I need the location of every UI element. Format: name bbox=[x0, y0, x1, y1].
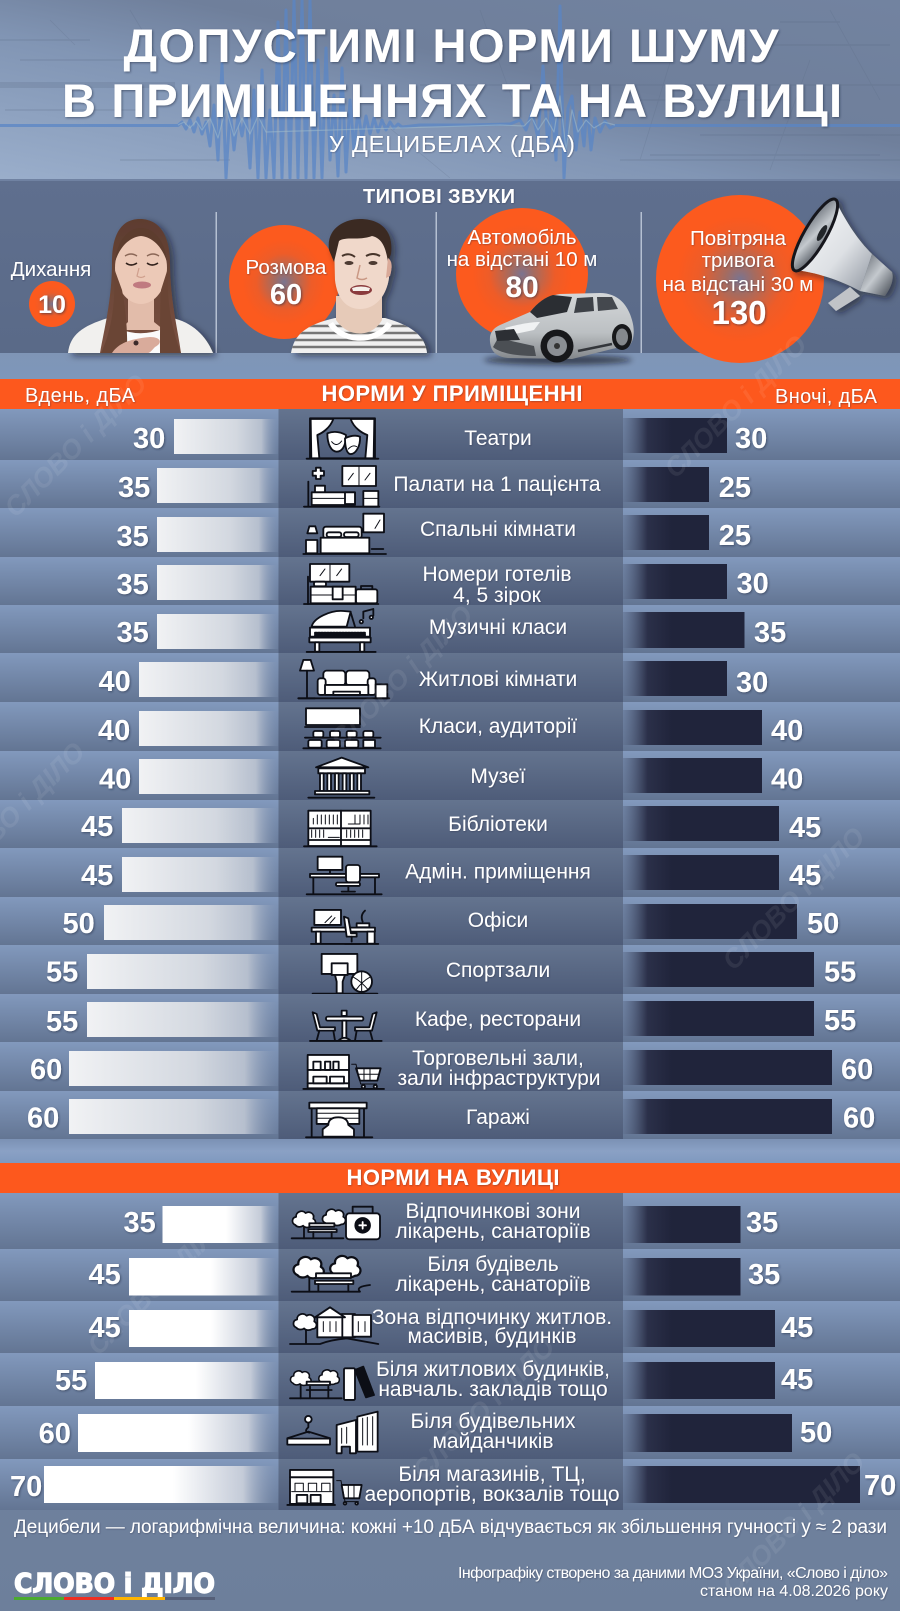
day value: 45 bbox=[81, 860, 113, 892]
night value: 30 bbox=[736, 667, 768, 699]
icon: living room bbox=[298, 660, 389, 698]
text: СЛОВО і ДІЛО bbox=[659, 330, 813, 484]
item: car bbox=[447, 208, 634, 365]
day value: 35 bbox=[116, 521, 149, 553]
panel: typical sounds bbox=[0, 179, 900, 379]
night bar bbox=[623, 564, 727, 599]
icon: shop shelves and cart bbox=[303, 1055, 384, 1089]
label: siren: на відстані 30 м bbox=[663, 273, 813, 296]
night bar bbox=[623, 904, 797, 939]
day value: 45 bbox=[88, 1312, 121, 1344]
icon: crane hook and buildings bbox=[287, 1412, 378, 1453]
header panel bbox=[0, 0, 900, 179]
day value: 50 bbox=[62, 908, 95, 940]
label: лікарень, санаторіїв bbox=[395, 1273, 591, 1296]
night value: 25 bbox=[719, 472, 751, 504]
night bar bbox=[623, 467, 709, 502]
day bar bbox=[78, 1414, 278, 1452]
row: music classes bbox=[0, 605, 900, 653]
icon: residential area bbox=[290, 1307, 378, 1344]
night value: 35 bbox=[746, 1207, 778, 1239]
day bar bbox=[157, 614, 278, 649]
photo: car bbox=[484, 293, 634, 365]
circle: conversation 60 bbox=[229, 225, 339, 339]
heading bar: outdoor norms bbox=[0, 1163, 900, 1193]
day value: 40 bbox=[99, 764, 131, 796]
label: Біля житлових будинків, bbox=[376, 1358, 610, 1381]
icon: library bbox=[304, 811, 377, 846]
text: СЛОВО і ДІЛО bbox=[82, 1207, 236, 1361]
label: Зона відпочинку житлов. bbox=[372, 1306, 612, 1329]
icon: shop and cart bbox=[287, 1470, 362, 1505]
item: conversation bbox=[229, 219, 440, 353]
heading: indoor: НОРМИ У ПРИМІЩЕННІ bbox=[322, 381, 582, 406]
night bar bbox=[623, 1099, 832, 1134]
icon: grand piano bbox=[307, 609, 376, 652]
subtitle: У ДЕЦИБЕЛАХ (ДБА) bbox=[329, 131, 575, 157]
panel: indoor norms bbox=[0, 409, 900, 1139]
label: Номери готелів bbox=[422, 563, 572, 586]
row: living rooms bbox=[0, 653, 900, 702]
night bar bbox=[623, 758, 762, 793]
icon: garage bbox=[306, 1103, 372, 1137]
label: зали інфраструктури bbox=[397, 1067, 601, 1090]
row: museums bbox=[0, 751, 900, 800]
day value: 35 bbox=[118, 472, 150, 504]
day bar bbox=[139, 662, 278, 697]
circle: breathing 10 bbox=[29, 281, 75, 327]
icon: office bbox=[311, 910, 378, 944]
day bar bbox=[157, 517, 278, 552]
row: shopping halls bbox=[0, 1042, 900, 1091]
icon: museum bbox=[308, 758, 374, 798]
photo: man bbox=[285, 219, 440, 353]
day bar bbox=[122, 857, 278, 892]
day bar bbox=[157, 468, 278, 503]
heading: typical sounds: ТИПОВІ ЗВУКИ bbox=[363, 186, 515, 208]
night bar bbox=[623, 710, 762, 745]
row: cafes bbox=[0, 994, 900, 1042]
column label: night: Вночі, дБА bbox=[775, 386, 878, 408]
icon: park bench and trees bbox=[292, 1256, 370, 1292]
label: навчаль. закладів тощо bbox=[378, 1378, 608, 1401]
label: Біля магазинів, ТЦ, bbox=[398, 1463, 586, 1486]
label: car: на відстані 10 м bbox=[447, 248, 597, 271]
night bar bbox=[623, 1001, 814, 1036]
label: car: Автомобіль bbox=[467, 226, 577, 249]
label: Класи, аудиторії bbox=[419, 715, 577, 738]
night value: 25 bbox=[719, 520, 751, 552]
text: СЛОВО і ДІЛО bbox=[407, 1332, 561, 1486]
row: garages bbox=[0, 1091, 900, 1139]
day bar bbox=[122, 808, 278, 843]
row: admin premises bbox=[0, 848, 900, 897]
night bar bbox=[623, 1310, 775, 1347]
label: аеропортів, вокзалів тощо bbox=[364, 1483, 620, 1506]
night bar bbox=[623, 1414, 792, 1452]
night bar bbox=[623, 952, 814, 987]
night value: 50 bbox=[807, 908, 839, 940]
icon: theatre bbox=[307, 418, 378, 459]
day bar bbox=[139, 711, 278, 746]
heading: outdoor: НОРМИ НА ВУЛИЦІ bbox=[346, 1165, 560, 1190]
row: classrooms bbox=[0, 702, 900, 751]
label: майданчиків bbox=[432, 1430, 554, 1453]
label: Театри bbox=[464, 427, 532, 450]
night value: 55 bbox=[824, 1005, 856, 1037]
text: СЛОВО і ДІЛО bbox=[717, 822, 871, 976]
title: ДОПУСТИМІ НОРМИ ШУМУ bbox=[124, 19, 779, 72]
day bar bbox=[174, 419, 278, 454]
label: Відпочинкові зони bbox=[406, 1200, 580, 1223]
day value: 55 bbox=[55, 1365, 87, 1397]
logo: СЛОВО і ДІЛО bbox=[14, 1568, 215, 1600]
label: conversation: Розмова bbox=[246, 256, 327, 279]
row: construction sites bbox=[0, 1406, 900, 1459]
icon: gym bbox=[313, 954, 377, 994]
day bar bbox=[104, 905, 278, 940]
icon: cafe bbox=[310, 1011, 382, 1041]
label: siren: тривога bbox=[702, 249, 775, 272]
row: near homes and schools bbox=[0, 1353, 900, 1406]
label: масивів, будинків bbox=[408, 1325, 576, 1348]
night value: 50 bbox=[800, 1417, 832, 1449]
row: offices bbox=[0, 897, 900, 945]
title: В ПРИМІЩЕННЯХ ТА НА ВУЛИЦІ bbox=[62, 74, 842, 127]
day bar bbox=[129, 1258, 278, 1296]
night bar bbox=[623, 1206, 740, 1243]
day value: 35 bbox=[124, 1207, 156, 1239]
label: Офіси bbox=[468, 909, 528, 932]
circle: car 80 bbox=[456, 208, 588, 340]
text: СЛОВО і ДІЛО bbox=[325, 600, 479, 754]
label: Біля будівель bbox=[427, 1253, 559, 1276]
day bar bbox=[129, 1310, 278, 1347]
row: libraries bbox=[0, 800, 900, 848]
panel: outdoor norms bbox=[0, 1193, 900, 1510]
night bar bbox=[623, 418, 727, 453]
night value: 45 bbox=[781, 1312, 813, 1344]
row: theatres bbox=[0, 409, 900, 460]
icon: bedroom bbox=[303, 514, 386, 554]
night value: 40 bbox=[771, 764, 803, 796]
value: 60: 60 bbox=[270, 279, 302, 311]
night value: 60 bbox=[843, 1102, 875, 1134]
day value: 35 bbox=[116, 617, 149, 649]
day value: 60 bbox=[27, 1102, 59, 1134]
row: near hospital buildings bbox=[0, 1249, 900, 1301]
circle: siren 130 bbox=[656, 195, 824, 363]
night value: 45 bbox=[789, 812, 821, 844]
label: siren: Повітряна bbox=[690, 227, 787, 250]
day value: 55 bbox=[46, 1006, 78, 1038]
note: Децибели — логарифмічна величина: кожні +10 дБА відчувається як збільшення гучності у ≈ 2 рази bbox=[14, 1517, 887, 1538]
night bar bbox=[623, 612, 744, 648]
day bar bbox=[69, 1051, 278, 1086]
label: Спортзали bbox=[446, 959, 550, 982]
row: hospital rest zones bbox=[0, 1193, 900, 1249]
label: Палати на 1 пацієнта bbox=[393, 473, 601, 496]
icon: classroom bbox=[303, 708, 381, 748]
icon: admin desk bbox=[307, 857, 382, 894]
night value: 30 bbox=[736, 568, 769, 600]
waveform bbox=[0, 0, 900, 178]
night value: 35 bbox=[754, 617, 786, 649]
day value: 60 bbox=[39, 1418, 71, 1450]
night value: 55 bbox=[824, 956, 856, 988]
night value: 35 bbox=[748, 1259, 780, 1291]
row: hotel rooms bbox=[0, 557, 900, 607]
value: 80: 80 bbox=[505, 271, 539, 304]
icon: hospital ward bbox=[304, 466, 379, 507]
item: air raid siren bbox=[656, 194, 893, 363]
day value: 40 bbox=[98, 715, 130, 747]
label: Кафе, ресторани bbox=[415, 1008, 581, 1031]
day bar bbox=[87, 954, 278, 989]
icon: park and first-aid kit bbox=[292, 1207, 380, 1239]
label: Торговельні зали, bbox=[412, 1047, 584, 1070]
day value: 30 bbox=[133, 423, 165, 455]
night bar bbox=[623, 515, 709, 550]
source credit: станом на 4.08.2026 року bbox=[700, 1583, 888, 1600]
day value: 35 bbox=[116, 569, 149, 601]
column label: day: Вдень, дБА bbox=[25, 385, 136, 407]
day value: 40 bbox=[98, 666, 131, 698]
day value: 60 bbox=[30, 1054, 62, 1086]
row: gyms bbox=[0, 945, 900, 994]
label: 4, 5 зірок bbox=[453, 584, 542, 607]
day bar bbox=[139, 759, 278, 794]
night value: 45 bbox=[781, 1364, 813, 1396]
icon: megaphone bbox=[785, 194, 893, 311]
day value: 45 bbox=[81, 811, 113, 843]
label: Бібліотеки bbox=[448, 813, 548, 836]
day bar bbox=[157, 565, 278, 600]
day value: 55 bbox=[46, 956, 78, 988]
label: Адмін. приміщення bbox=[405, 860, 591, 884]
night value: 70 bbox=[864, 1470, 896, 1502]
icon: hotel room bbox=[304, 564, 378, 604]
row: bedrooms bbox=[0, 508, 900, 557]
night value: 60 bbox=[841, 1054, 873, 1086]
day value: 70 bbox=[10, 1471, 42, 1503]
day bar bbox=[95, 1362, 278, 1399]
label: лікарень, санаторіїв bbox=[395, 1220, 591, 1243]
heading bar: indoor norms bbox=[0, 379, 900, 409]
row: shops and airports bbox=[0, 1459, 900, 1510]
night bar bbox=[623, 1050, 832, 1085]
night bar bbox=[623, 855, 779, 890]
night bar bbox=[623, 661, 727, 696]
night bar bbox=[623, 1466, 860, 1503]
text: СЛОВО і ДІЛО bbox=[717, 1447, 871, 1601]
text: СЛОВО і ДІЛО bbox=[0, 369, 153, 523]
photo: woman bbox=[68, 219, 213, 353]
value: 130: 130 bbox=[711, 294, 767, 331]
day bar bbox=[162, 1206, 278, 1243]
day bar bbox=[87, 1002, 278, 1037]
value: 10: 10 bbox=[38, 291, 66, 319]
label: Біля будівельних bbox=[410, 1410, 576, 1433]
item: breathing bbox=[11, 219, 213, 353]
night bar bbox=[623, 1258, 740, 1296]
row: single-patient wards bbox=[0, 460, 900, 508]
label: Спальні кімнати bbox=[420, 518, 576, 541]
day value: 45 bbox=[88, 1259, 121, 1291]
label: breathing: Дихання bbox=[11, 258, 91, 281]
night bar bbox=[623, 806, 779, 841]
icon: park and books bbox=[290, 1367, 374, 1400]
day bar bbox=[69, 1099, 278, 1134]
night value: 45 bbox=[789, 860, 821, 892]
night bar bbox=[623, 1362, 775, 1399]
night value: 30 bbox=[735, 423, 767, 455]
source credit: Інфографіку створено за даними МОЗ України, «Слово і діло» bbox=[458, 1565, 888, 1582]
day bar bbox=[44, 1466, 278, 1503]
label: Музичні класи bbox=[429, 616, 567, 639]
label: Гаражі bbox=[466, 1106, 530, 1129]
label: Житлові кімнати bbox=[419, 668, 577, 691]
row: residential rest zones bbox=[0, 1301, 900, 1353]
label: Музеї bbox=[470, 765, 526, 788]
night value: 40 bbox=[771, 715, 803, 747]
